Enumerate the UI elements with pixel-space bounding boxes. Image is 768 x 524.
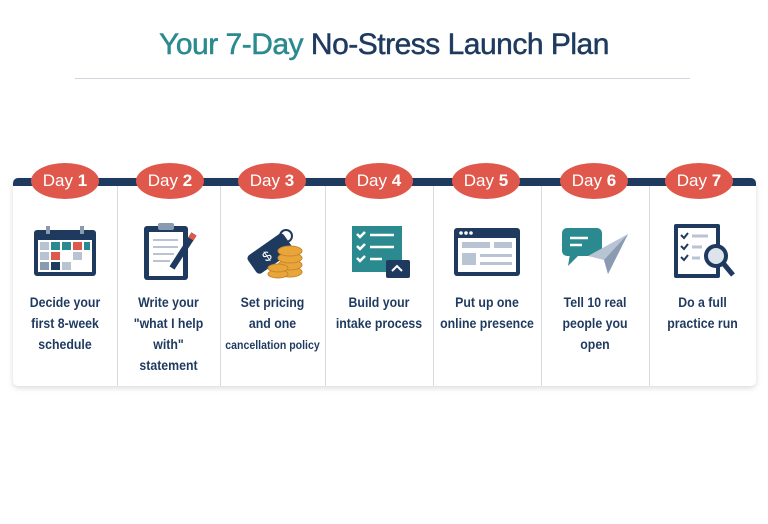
badge: day 7 <box>665 163 733 199</box>
text: day 2: "what I help <box>134 315 203 331</box>
icon: checklist magnifier <box>674 224 735 278</box>
text: day 6: Tell 10 real <box>564 294 626 310</box>
badge: day 3 <box>238 163 306 199</box>
icon: calendar <box>34 226 96 276</box>
text: day 3: cancellation policy <box>225 338 320 352</box>
panel: timeline <box>13 178 756 386</box>
text: day 3: Set pricing <box>241 294 304 310</box>
badge: day 2: Day 2 <box>148 171 192 190</box>
text: day 3: and one <box>249 315 296 331</box>
text: day 4: intake process <box>336 315 422 331</box>
badge: day 5 <box>452 163 520 199</box>
badge: day 6 <box>560 163 628 199</box>
icon: price tag and coins <box>247 229 302 278</box>
text: day 6: people you <box>562 315 628 331</box>
badge: day 1: Day 1 <box>43 171 87 190</box>
text: day 1: schedule <box>38 336 92 352</box>
column: day 4 <box>325 186 434 386</box>
column: day 5 <box>433 186 542 386</box>
text: day 7 <box>667 294 738 331</box>
text: day 6 <box>562 294 628 352</box>
badge: day 4 <box>345 163 413 199</box>
icon: browser window <box>454 228 520 276</box>
text: day 2: Write your <box>138 294 199 310</box>
badge: day 3: Day 3 <box>250 171 294 190</box>
badge: day 1 <box>31 163 99 199</box>
text: day 2: statement <box>139 357 198 373</box>
badge: day 6: Day 6 <box>572 171 616 190</box>
text: day 7: practice run <box>667 315 738 331</box>
text: day 5 <box>440 294 534 331</box>
column: day 3 <box>220 186 326 386</box>
title: Your 7-Day No-Stress Launch Plan <box>159 28 609 61</box>
icon: chat and paper plane <box>562 228 628 274</box>
badge: day 2 <box>136 163 204 199</box>
text: day 3 <box>225 294 320 352</box>
text: day 2: with" <box>153 336 184 352</box>
column: day 1 <box>13 186 118 386</box>
badge: day 5: Day 5 <box>464 171 508 190</box>
text: day 4 <box>336 294 422 331</box>
text: day 1: first 8-week <box>31 315 99 331</box>
text: day 1 <box>30 294 100 352</box>
text: day 2 <box>134 294 203 373</box>
column: day 6 <box>541 186 650 386</box>
text: day 4: Build your <box>349 294 409 310</box>
text: day 5: online presence <box>440 315 534 331</box>
badge: day 7: Day 7 <box>677 171 721 190</box>
column: day 2 <box>117 186 221 386</box>
text: day 5: Put up one <box>455 294 519 310</box>
icon: checklist <box>352 226 410 278</box>
text: day 6: open <box>580 336 610 352</box>
column: day 7 <box>667 224 738 331</box>
text: day 7: Do a full <box>678 294 727 310</box>
badge: day 4: Day 4 <box>357 171 401 190</box>
icon: clipboard <box>144 223 196 280</box>
text: day 1: Decide your <box>30 294 100 310</box>
icon: price tag and coins: $ <box>259 247 274 265</box>
